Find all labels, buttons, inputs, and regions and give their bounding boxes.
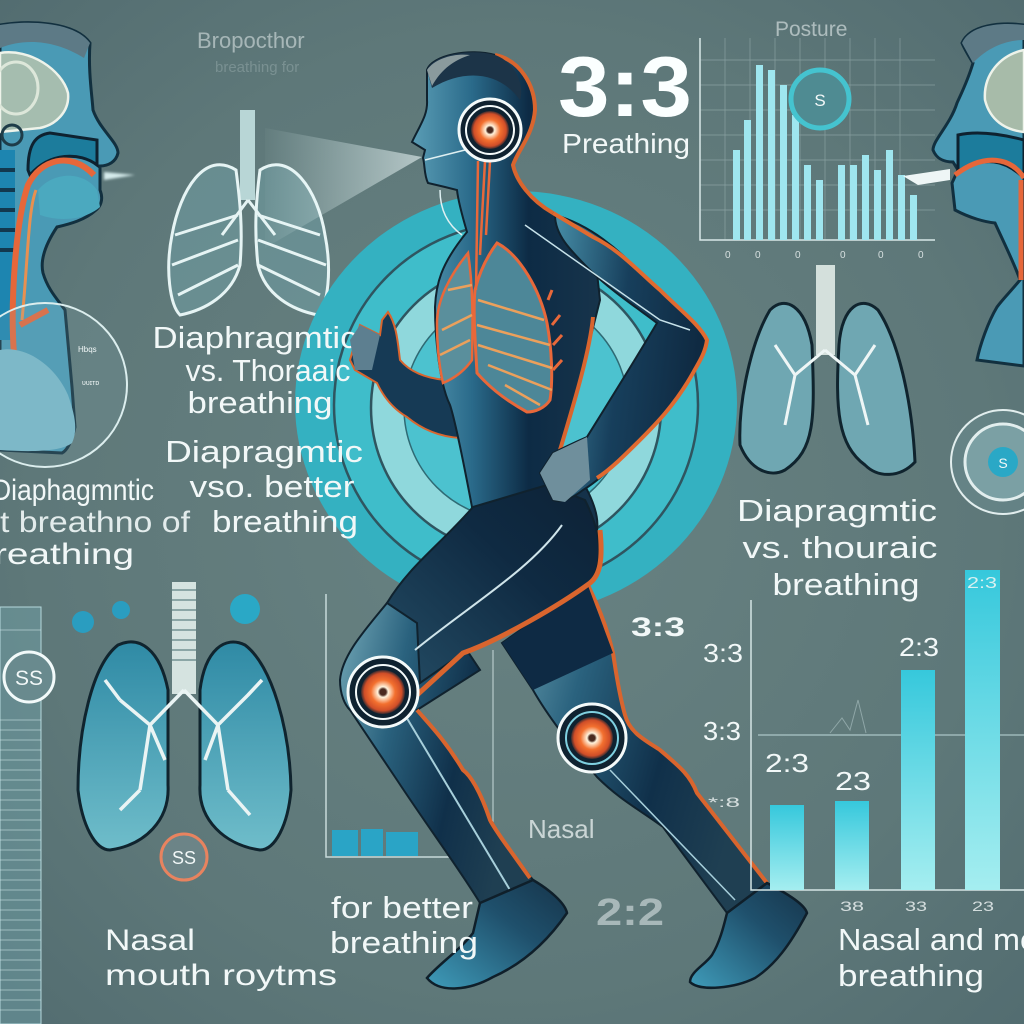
text: nasal and mouth breathing: Nasal and me (838, 922, 1024, 957)
panel: left head anatomy (0, 23, 135, 467)
panel: right bar chart: 23 (972, 898, 994, 914)
heading: 3:3 breathing: Preathing (562, 128, 690, 159)
panel: right bar chart (703, 570, 1024, 914)
text: diaphragmatic vs thoracic right: Diapragmtic (737, 493, 937, 528)
panel: right bar chart: *:8 (708, 794, 740, 810)
text: diaphragmatic vs better: vso. better (190, 469, 354, 504)
icon: breath beam (265, 128, 422, 248)
text: blurred subtitle: breathing for (215, 59, 299, 76)
panel: posture bar chart top right: Posture (775, 18, 847, 41)
text: diaphragmatic vs thoracic: breathing (188, 385, 332, 420)
text: for better breathing (330, 890, 478, 960)
text: nasal mouth rhythms (105, 924, 337, 992)
panel: right bar chart: 33 (905, 898, 927, 914)
value labels: 3:3 (703, 716, 741, 746)
text: top label left: Bropocthor (197, 28, 305, 53)
text: for better breathing: for better (331, 890, 473, 925)
text: diaphragmatic vs thoracic right: vs. thouraic (742, 530, 938, 565)
icon: circle callout (0, 303, 127, 467)
panel: posture bar chart top right (700, 18, 935, 261)
icon: circle callout: ᴜᴜɪᴛᴅ (82, 380, 99, 387)
text: diaphragmatic vs better: Diapragmtic (165, 434, 363, 469)
chart tick labels (725, 250, 924, 261)
value labels: 23 (835, 766, 871, 796)
icon: wireframe lungs top (169, 110, 329, 315)
figure: runner (340, 52, 807, 988)
icon: S badge (791, 70, 849, 128)
chart tick labels: 0 (918, 250, 924, 261)
icon: SS badge: SS (15, 667, 43, 690)
icon: S badge: S (814, 91, 826, 110)
chart tick labels: 0 (795, 250, 801, 261)
text: nasal mouth rhythms: mouth roytms (105, 959, 337, 992)
value labels: 3:3 (703, 638, 743, 668)
icon: joint head (459, 99, 521, 161)
text: left clipped block (0, 474, 191, 571)
value labels: 2:3 (967, 575, 997, 592)
text: nasal center: Nasal (528, 814, 594, 844)
text: diaphragmatic vs better (165, 434, 363, 539)
text: diaphragmatic vs thoracic right: breathing (772, 567, 920, 602)
shorts (387, 485, 599, 683)
icon: SS badge (4, 652, 54, 702)
chart tick labels: 0 (755, 250, 761, 261)
icon: joint knee rear (558, 704, 626, 772)
icon: floating dots (72, 594, 260, 633)
icon: joint knee front (348, 657, 418, 727)
mouth wire (425, 150, 465, 235)
right arm (540, 215, 707, 501)
text: diaphragmatic vs better: breathing (212, 504, 358, 539)
front leg (340, 603, 533, 903)
icon: right target badge (951, 410, 1024, 514)
torso and head (412, 52, 600, 583)
rear leg (502, 583, 767, 913)
text: nasal and mouth breathing (838, 922, 1024, 993)
chart tick labels: 0 (840, 250, 846, 261)
icon: target circles behind runner (295, 191, 737, 615)
text: 3:3 small: 3:3 (631, 612, 685, 642)
left arm (350, 312, 460, 438)
chart tick labels: 0 (725, 250, 731, 261)
rear shoe (690, 883, 807, 988)
value labels: 2:3 (765, 748, 809, 778)
panel: left ruler scale (0, 607, 54, 1024)
panel: right head anatomy (903, 24, 1024, 366)
text: 2:2: 2:2 (596, 892, 664, 934)
text: diaphragmatic vs thoracic (152, 320, 358, 420)
icon: right target badge: S (998, 455, 1008, 471)
heading: 3:3 breathing: 3:3 (558, 40, 692, 135)
icon: top right large lungs (740, 265, 915, 474)
text: diaphragmatic vs thoracic: Diaphragmtic (152, 320, 358, 355)
text: nasal mouth rhythms: Nasal (105, 924, 195, 957)
value labels: 2:3 (899, 632, 939, 662)
text: left clipped block: t breathno of (0, 506, 191, 539)
front shoe (427, 880, 567, 988)
hair (427, 52, 521, 100)
panel: right bar chart: 38 (840, 898, 864, 914)
text: nasal and mouth breathing: breathing (838, 958, 984, 993)
text: diaphragmatic vs thoracic right (737, 493, 938, 602)
trachea line (476, 161, 490, 290)
bars (770, 805, 804, 890)
lungs on chest (437, 253, 473, 383)
chart tick labels: 0 (878, 250, 884, 261)
value labels (703, 575, 997, 796)
text: diaphragmatic vs thoracic: vs. Thoraaic (186, 353, 350, 388)
icon: orange SS badge (161, 834, 207, 880)
icon: bottom-left lungs (78, 582, 291, 850)
text: for better breathing: breathing (330, 925, 478, 960)
panel: small center bar chart (326, 594, 495, 857)
orange rim back (495, 55, 553, 213)
icon: orange SS badge: SS (172, 848, 196, 868)
icon: circle callout: Hbqs (78, 345, 97, 354)
